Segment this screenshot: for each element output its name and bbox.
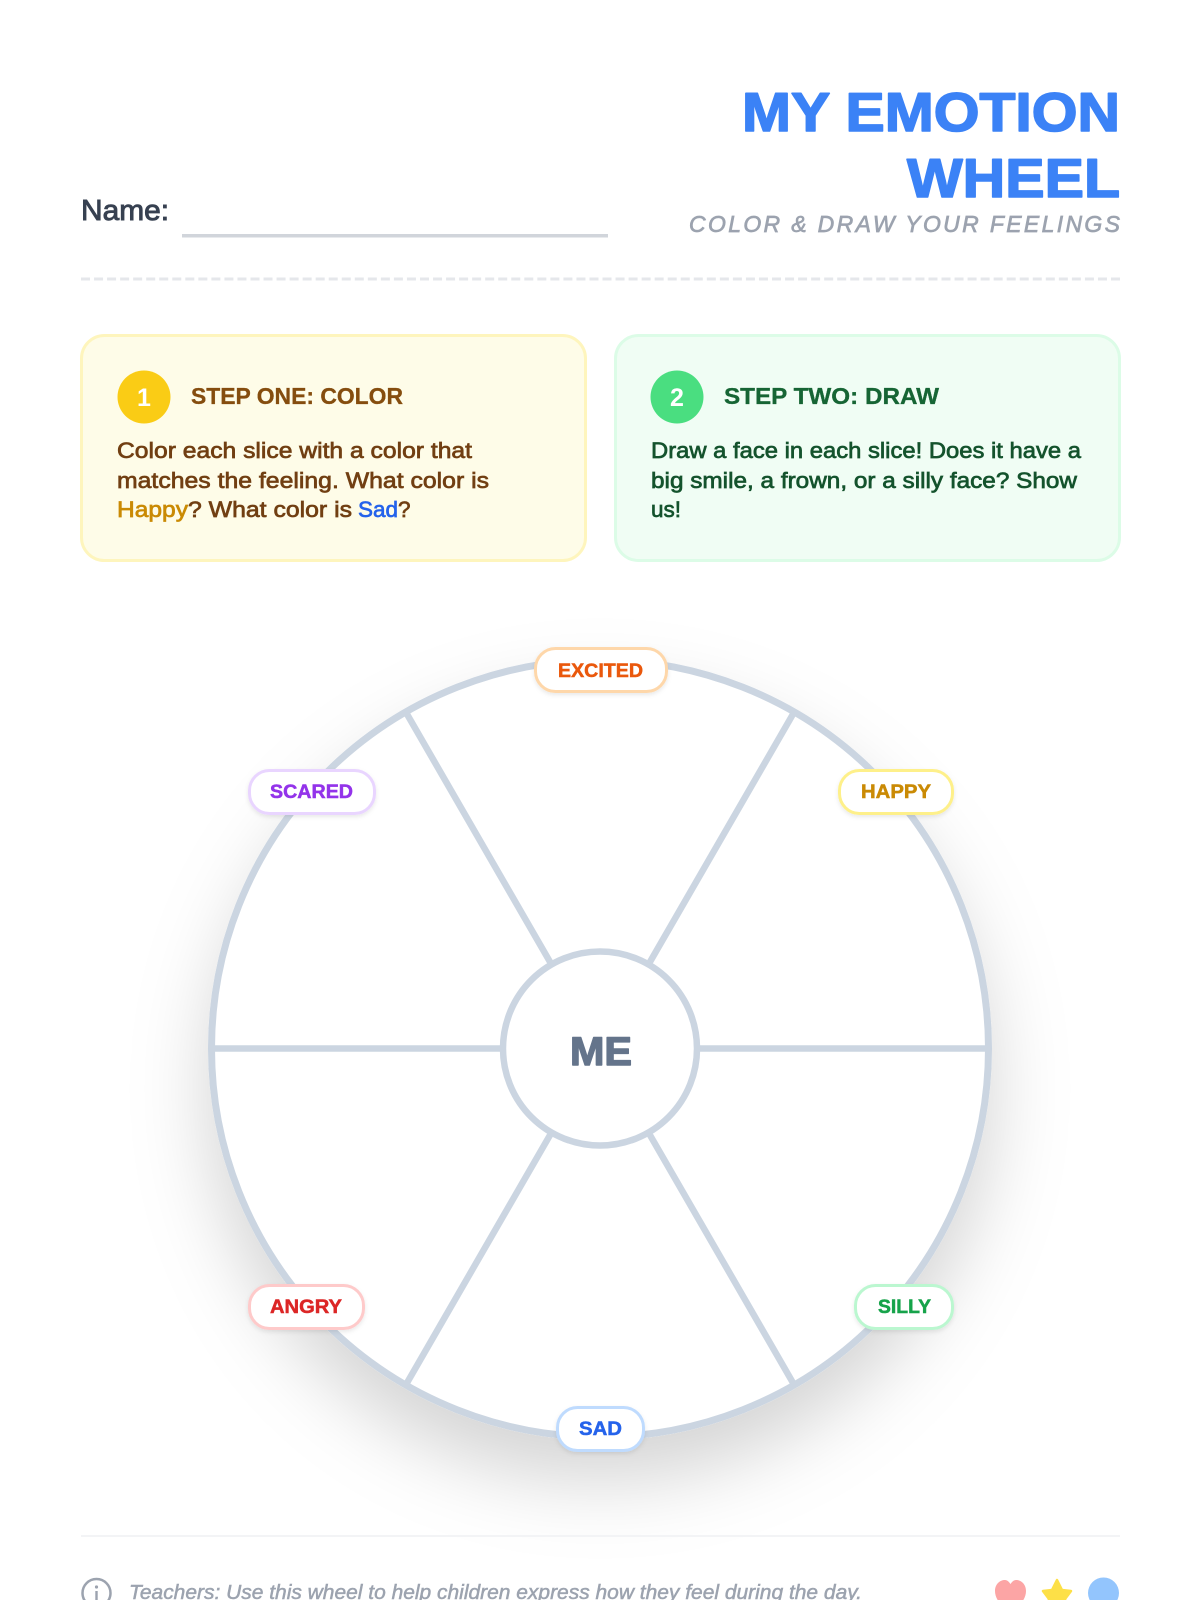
label: sad: [558, 1408, 644, 1450]
badge 2: [650, 370, 704, 424]
step one instructions: Happy: [117, 497, 189, 522]
name field: [81, 195, 608, 238]
badge 2: 2: [670, 384, 684, 412]
step two heading: STEP TWO: DRAW: [724, 383, 939, 409]
badge 1: [118, 370, 170, 424]
name field: Name:: [81, 195, 169, 227]
icon: heart: [995, 1580, 1026, 1600]
panel: step two: [616, 336, 1120, 560]
label: sad: SAD: [579, 1419, 622, 1440]
label: happy: [840, 770, 952, 814]
badge 1: 1: [137, 384, 151, 412]
step one instructions: matches the feeling. What color is: [117, 468, 489, 493]
step one instructions: [117, 438, 489, 522]
card background: [616, 336, 1120, 560]
label: scared: [250, 770, 374, 814]
title: MY EMOTION: [742, 81, 1120, 143]
emotion wheel: [212, 648, 988, 1450]
label: silly: [856, 1286, 952, 1328]
icon: circle: [1088, 1578, 1119, 1600]
step one instructions: ?: [398, 497, 411, 522]
step one instructions: Sad: [358, 497, 398, 522]
step two instructions: Draw a face in each slice! Does it have a: [651, 438, 1082, 463]
step two instructions: [651, 438, 1082, 522]
card background: [82, 336, 586, 560]
wheel outer circle: [212, 660, 988, 1437]
wheel slice dividers: [213, 713, 987, 1384]
label: excited: EXCITED: [558, 661, 643, 682]
label: happy: HAPPY: [861, 782, 931, 803]
label: angry: [250, 1286, 364, 1328]
step two instructions: us!: [651, 497, 681, 522]
icon: star: [1043, 1580, 1071, 1600]
step one heading: STEP ONE: COLOR: [191, 383, 403, 409]
center hub: ME: [570, 1030, 632, 1074]
label: silly: SILLY: [878, 1297, 931, 1318]
label: excited: [536, 648, 666, 692]
step two instructions: big smile, a frown, or a silly face? Show: [651, 468, 1078, 493]
icon: info: [82, 1579, 110, 1600]
step one instructions: Color each slice with a color that: [117, 438, 473, 463]
panel: step one: [82, 336, 586, 560]
step one instructions: ? What color is: [188, 497, 352, 522]
label: scared: SCARED: [270, 782, 353, 803]
label: angry: ANGRY: [270, 1297, 342, 1318]
subtitle: COLOR & DRAW YOUR FEELINGS: [689, 211, 1121, 237]
title: WHEEL: [907, 147, 1120, 209]
title: [742, 81, 1120, 209]
center hub: [503, 952, 697, 1146]
